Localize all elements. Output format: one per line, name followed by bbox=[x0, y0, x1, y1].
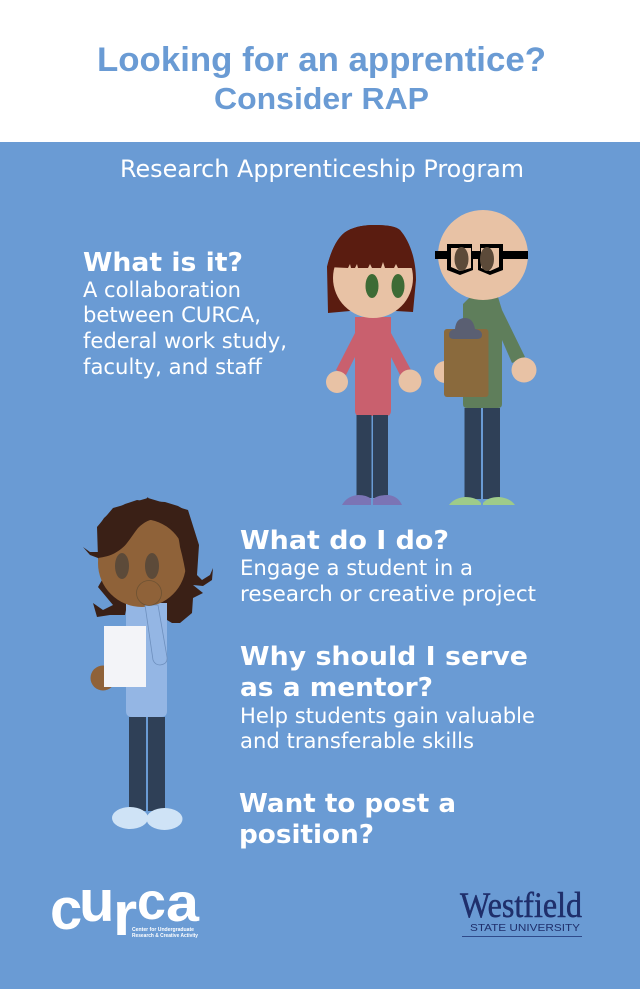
clipboard bbox=[444, 318, 488, 397]
text block: what do I do: research or creative project bbox=[240, 582, 536, 606]
text block: what do I do: What do I do? bbox=[240, 526, 449, 556]
text block: what is it: A collaboration bbox=[83, 278, 241, 302]
glasses bbox=[435, 244, 528, 275]
text block: what do I do: Engage a student in a bbox=[240, 556, 473, 580]
illustration: man with glasses and clipboard bbox=[434, 210, 536, 505]
illustration: woman in red sweater bbox=[326, 225, 422, 505]
title bbox=[97, 41, 546, 116]
text block: why should I serve as a mentor bbox=[240, 642, 535, 753]
logo: CURCA: a bbox=[166, 873, 200, 933]
text block: what is it: federal work study, bbox=[83, 329, 287, 353]
logo: CURCA: Center for Undergraduate bbox=[132, 927, 194, 933]
subtitle: Research Apprenticeship Program bbox=[120, 155, 524, 183]
title: Looking for an apprentice? bbox=[97, 41, 546, 79]
text block: what do I do bbox=[240, 526, 536, 606]
logo: CURCA: c bbox=[137, 873, 166, 931]
text block: why should I serve as a mentor: and transferable skills bbox=[240, 729, 474, 753]
text block: want to post a position: Want to post a bbox=[239, 789, 456, 819]
text block: what is it: between CURCA, bbox=[83, 303, 261, 327]
text block: why should I serve as a mentor: as a mentor? bbox=[240, 673, 433, 703]
text block: what is it: faculty, and staff bbox=[83, 355, 263, 379]
logo: CURCA: r bbox=[113, 880, 137, 949]
logo: CURCA: c bbox=[50, 877, 82, 942]
logo: CURCA bbox=[50, 869, 200, 949]
logo: CURCA: Research & Creative Activity bbox=[132, 933, 198, 939]
text block: why should I serve as a mentor: Help students gain valuable bbox=[240, 704, 535, 728]
text block: why should I serve as a mentor: Why should I serve bbox=[240, 642, 528, 672]
text block: what is it bbox=[83, 248, 287, 379]
text block: want to post a position: position? bbox=[239, 820, 374, 850]
text block: what is it: What is it? bbox=[83, 248, 243, 278]
logo: CURCA: u bbox=[79, 869, 114, 934]
illustration: woman with curly hair holding paper bbox=[83, 497, 213, 830]
logo: Westfield State University: STATE UNIVERSITY bbox=[470, 922, 580, 934]
text block: want to post a position bbox=[239, 789, 456, 850]
logo: Westfield State University: Westfield bbox=[460, 885, 582, 925]
title: Consider RAP bbox=[214, 81, 429, 116]
header band bbox=[0, 0, 640, 142]
